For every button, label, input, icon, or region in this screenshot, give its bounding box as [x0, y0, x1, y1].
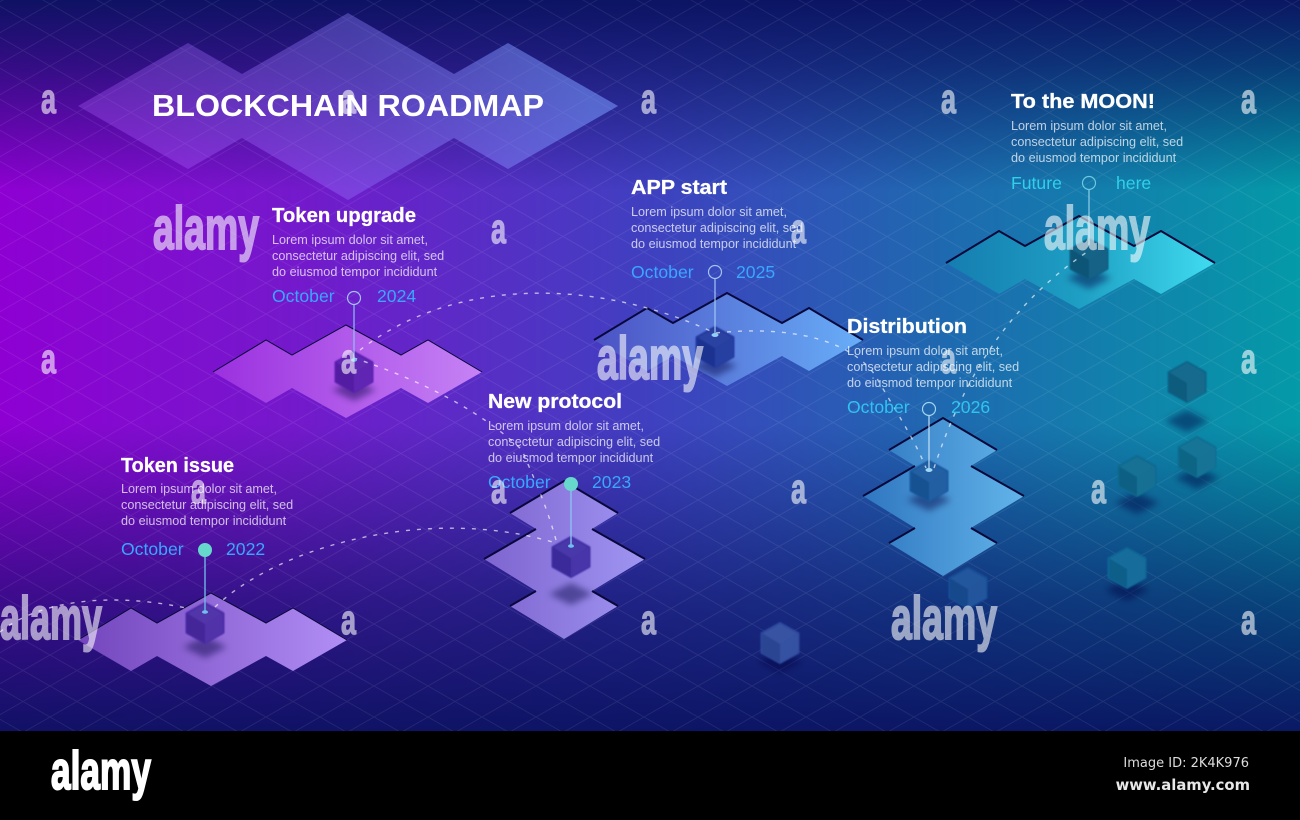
platform: to the moon — [946, 216, 1215, 309]
body text — [121, 482, 293, 528]
watermark: small: a — [41, 75, 56, 122]
date: October — [272, 286, 335, 306]
platform: token issue — [78, 593, 347, 686]
watermark: small: a — [491, 465, 506, 512]
cube: distribution — [907, 462, 951, 511]
heading: Distribution — [847, 315, 967, 338]
body text: do eiusmod tempor incididunt — [488, 451, 654, 465]
date: October — [488, 472, 551, 492]
pin — [198, 543, 212, 614]
milestone: app start — [631, 176, 803, 337]
body text: do eiusmod tempor incididunt — [631, 237, 797, 251]
milestone: token upgrade — [272, 204, 444, 362]
watermark: large: alamy — [0, 585, 102, 652]
milestone: new protocol — [488, 390, 660, 548]
date — [847, 397, 990, 417]
milestone: distribution — [847, 315, 1019, 472]
body text: Lorem ipsum dolor sit amet, — [631, 205, 787, 219]
pin — [922, 402, 936, 472]
date: 2023 — [592, 472, 631, 492]
watermark: small: a — [341, 596, 356, 643]
watermark: small: a — [491, 205, 506, 252]
body text: consectetur adipiscing elit, sed — [272, 249, 444, 263]
body text — [631, 205, 803, 251]
cube: new protocol — [549, 538, 593, 605]
watermark: small: a — [1091, 465, 1106, 512]
footer logo: alamy — [51, 741, 151, 801]
heading: To the MOON! — [1011, 90, 1155, 113]
body text: consectetur adipiscing elit, sed — [121, 498, 293, 512]
watermark: small: a — [791, 205, 806, 252]
date: here — [1116, 173, 1151, 193]
date — [272, 286, 416, 306]
watermark: small: a — [641, 596, 656, 643]
cube: token issue — [183, 604, 227, 658]
date: 2024 — [377, 286, 416, 306]
date — [1011, 173, 1151, 193]
watermark: small: a — [41, 335, 56, 382]
title: BLOCKCHAIN ROADMAP — [152, 88, 544, 123]
cube: app start — [693, 328, 737, 377]
body text: Lorem ipsum dolor sit amet, — [488, 419, 644, 433]
watermark: small: a — [941, 75, 956, 122]
platform: app start — [594, 293, 863, 386]
body text: consectetur adipiscing elit, sed — [631, 221, 803, 235]
title banner — [78, 13, 618, 200]
watermark: small: a — [641, 75, 656, 122]
pin — [708, 266, 722, 337]
date: Future — [1011, 173, 1062, 193]
date: October — [847, 397, 910, 417]
body text — [272, 233, 444, 279]
heading: APP start — [631, 176, 727, 199]
heading: Token upgrade — [272, 204, 416, 227]
watermark: large — [0, 195, 1150, 652]
website: www.alamy.com — [1116, 777, 1250, 794]
platform: token upgrade — [213, 325, 482, 418]
body text: Lorem ipsum dolor sit amet, — [272, 233, 428, 247]
milestone: to the moon — [1011, 90, 1183, 245]
date: 2025 — [736, 262, 775, 282]
watermark: small: a — [1241, 75, 1256, 122]
watermark: small: a — [791, 465, 806, 512]
heading: New protocol — [488, 390, 622, 413]
watermark: small: a — [1241, 335, 1256, 382]
date: 2022 — [226, 539, 265, 559]
pin — [1082, 176, 1096, 245]
cube: token upgrade — [332, 352, 376, 401]
body text — [488, 419, 660, 465]
watermark: large: alamy — [891, 585, 997, 652]
image id: Image ID: 2K4K976 — [1123, 756, 1249, 771]
date: 2026 — [951, 397, 990, 417]
cube: to the moon — [1067, 240, 1111, 289]
body text: do eiusmod tempor incididunt — [272, 265, 438, 279]
floating cubes — [758, 362, 1219, 673]
watermark: small: a — [191, 465, 206, 512]
watermark: small: a — [341, 335, 356, 382]
body text: consectetur adipiscing elit, sed — [1011, 135, 1183, 149]
pin — [348, 292, 360, 362]
body text: consectetur adipiscing elit, sed — [488, 435, 660, 449]
date — [488, 472, 631, 492]
body text — [847, 344, 1019, 390]
body text — [1011, 119, 1183, 165]
platform: new protocol — [484, 481, 645, 639]
dashed route — [0, 250, 1090, 632]
body text: Lorem ipsum dolor sit amet, — [121, 482, 277, 496]
date — [121, 539, 265, 559]
body text: Lorem ipsum dolor sit amet, — [1011, 119, 1167, 133]
watermark: small — [41, 75, 1256, 643]
watermark: large: alamy — [1044, 195, 1150, 262]
body text: do eiusmod tempor incididunt — [1011, 151, 1177, 165]
watermark: small: a — [941, 335, 956, 382]
pin — [564, 477, 578, 548]
body text: do eiusmod tempor incididunt — [847, 376, 1013, 390]
watermark: small: a — [1241, 596, 1256, 643]
date: October — [631, 262, 694, 282]
watermark: large: alamy — [597, 325, 703, 392]
date — [631, 262, 775, 282]
heading: Token issue — [121, 454, 234, 477]
milestone: token issue — [121, 454, 293, 614]
platform: distribution — [863, 418, 1024, 576]
body text: consectetur adipiscing elit, sed — [847, 360, 1019, 374]
watermark: small: a — [341, 75, 356, 122]
body text: do eiusmod tempor incididunt — [121, 514, 287, 528]
date: October — [121, 539, 184, 559]
watermark: large: alamy — [153, 195, 259, 262]
body text: Lorem ipsum dolor sit amet, — [847, 344, 1003, 358]
footer bar — [0, 731, 1300, 820]
